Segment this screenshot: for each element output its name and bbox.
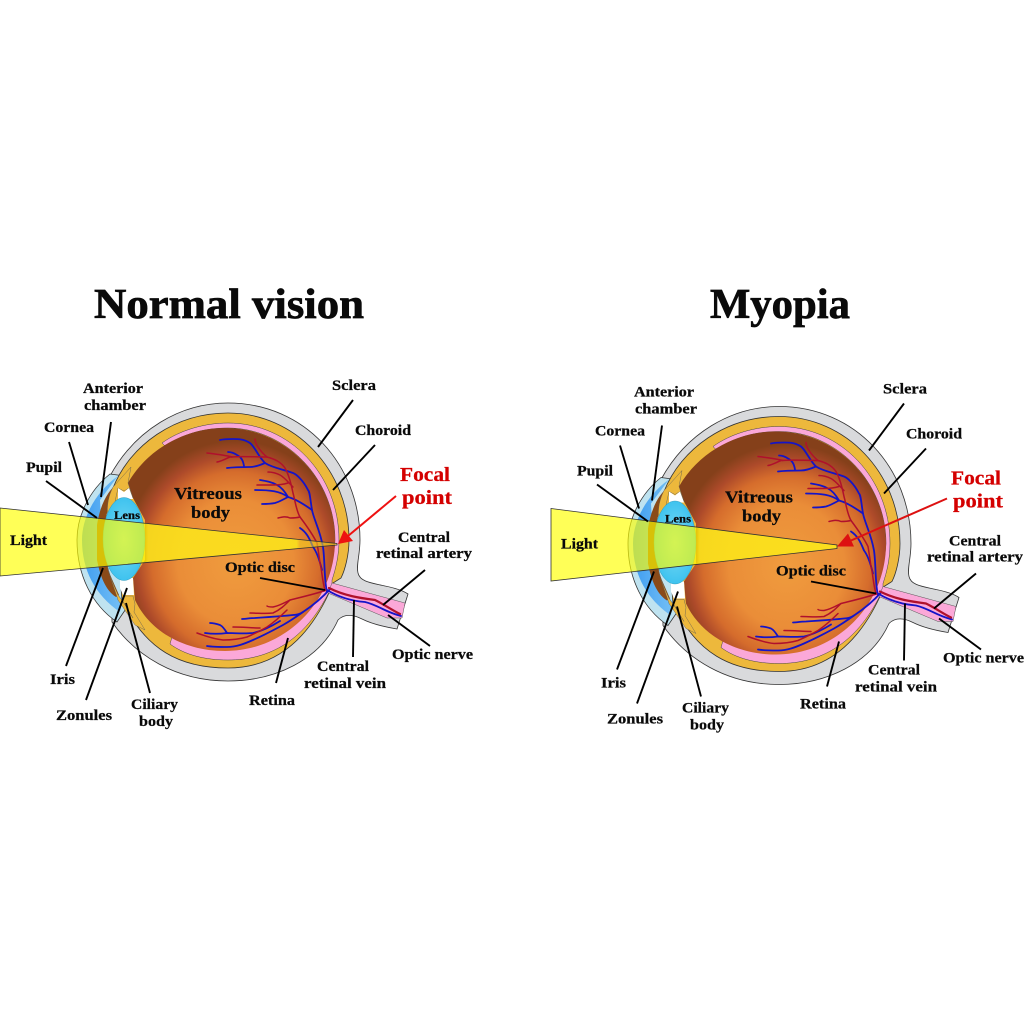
eye: retina	[713, 426, 890, 664]
eye: vitreous body	[128, 428, 335, 651]
label: Cornea: Cornea	[595, 424, 646, 440]
label: Anterior chamber: chamber	[635, 402, 697, 418]
eye: sclera and optic nerve sheath	[110, 403, 408, 681]
label: Vitreous body: body	[742, 506, 782, 526]
eye: lens	[103, 498, 145, 580]
label: Zonules: Zonules	[56, 708, 112, 724]
label: Pupil: Pupil	[577, 464, 613, 480]
eye: choroid	[113, 413, 349, 668]
eye: zonules upper	[118, 488, 133, 499]
label: Iris	[50, 568, 103, 688]
eye: zonules lower	[671, 582, 685, 598]
label: Central retinal artery: Central	[398, 530, 450, 546]
label: Optic disc	[225, 560, 325, 590]
vessels: upper retinal veins	[771, 442, 878, 596]
eye: sclera and optic nerve sheath	[661, 406, 959, 684]
label: Pupil	[577, 464, 648, 522]
label: Vitreous body	[174, 484, 242, 522]
eye: cornea	[628, 478, 683, 626]
label: Zonules	[56, 588, 127, 724]
label: Iris: Iris	[601, 676, 626, 692]
label: Vitreous body: Vitreous	[174, 484, 242, 503]
callout: Focal point	[837, 468, 1003, 546]
callout: Focal point: point	[402, 487, 452, 509]
label: Sclera: Sclera	[883, 382, 928, 398]
label: Ciliary body	[677, 606, 730, 734]
label: Ciliary body: body	[139, 714, 174, 730]
label: Central retinal vein	[855, 604, 938, 696]
eye: ciliary body lower	[659, 572, 696, 634]
label: Pupil: Pupil	[26, 460, 62, 476]
callout: Focal point: Focal	[400, 464, 450, 486]
callout: Focal point	[338, 464, 452, 544]
eye: ciliary body upper	[658, 470, 684, 522]
vessels: lower retinal veins	[205, 589, 330, 647]
vessels: lower retinal arteries	[197, 590, 327, 640]
label: Sclera: Sclera	[332, 378, 377, 394]
label: Pupil	[26, 460, 97, 518]
label: Zonules	[607, 592, 678, 728]
label: Sclera	[869, 382, 928, 450]
vessels: optic nerve bundle	[327, 588, 401, 616]
label: Cornea: Cornea	[44, 420, 95, 436]
eye: ciliary body lower	[108, 568, 145, 630]
vessels: upper retinal veins	[220, 439, 327, 592]
eye: vitreous body	[679, 432, 886, 654]
label: Optic nerve	[939, 618, 1024, 666]
eye: retina	[162, 423, 339, 660]
eye: anterior chamber	[633, 480, 673, 616]
eye: zonules upper	[669, 492, 684, 502]
label: Anterior chamber: Anterior	[83, 381, 143, 397]
label: Anterior chamber	[634, 384, 697, 500]
label: Optic disc: Optic disc	[225, 560, 295, 576]
callout: Focal point: Focal	[951, 468, 1001, 490]
label: Central retinal artery: Central	[949, 534, 1001, 550]
label: Zonules: Zonules	[607, 712, 663, 728]
label: Optic disc: Optic disc	[776, 564, 846, 580]
label: Anterior chamber: chamber	[84, 398, 146, 414]
label: Central retinal vein: retinal vein	[304, 676, 387, 692]
label: Vitreous body: body	[191, 503, 231, 522]
label: Choroid: Choroid	[355, 423, 412, 439]
label: Ciliary body: body	[690, 718, 725, 734]
panel: myopia eye diagram	[551, 382, 1024, 734]
eye: zonules lower	[120, 578, 134, 595]
label: Vitreous body	[725, 488, 793, 526]
label: Central retinal vein: Central	[868, 662, 920, 678]
label: Optic nerve: Optic nerve	[943, 650, 1024, 666]
label: Light: Light	[561, 536, 598, 552]
label: Vitreous body: Vitreous	[725, 488, 793, 506]
label: Central retinal vein	[304, 600, 387, 692]
eye: iris	[97, 483, 119, 597]
callout: Focal point: point	[953, 490, 1003, 512]
eye: optic nerve core	[328, 583, 405, 618]
vessels: lower retinal arteries	[748, 594, 878, 644]
label: Retina	[800, 642, 847, 712]
label: Central retinal artery: retinal artery	[376, 546, 473, 562]
light beam	[551, 508, 837, 581]
label: Lens: Lens	[665, 514, 692, 526]
vessels: upper retinal arteries	[758, 442, 876, 594]
label: Ciliary body: Ciliary	[131, 697, 179, 713]
panel: normal vision eye diagram	[0, 378, 473, 730]
label: Optic nerve	[388, 615, 473, 663]
label: Central retinal artery	[376, 530, 473, 605]
label: Ciliary body: Ciliary	[682, 700, 730, 716]
label: Anterior chamber: Anterior	[634, 384, 694, 400]
label: Choroid	[884, 426, 963, 494]
label: Choroid: Choroid	[906, 426, 963, 442]
eye: choroid	[664, 416, 900, 672]
title: Myopia: Myopia	[710, 282, 850, 328]
eye: ciliary body upper	[107, 467, 133, 518]
label: Retina: Retina	[800, 696, 847, 712]
label: Retina	[249, 638, 296, 709]
eye: lens	[654, 501, 696, 584]
eye: anterior chamber	[82, 476, 122, 612]
vessels: upper retinal arteries	[207, 439, 325, 590]
label: Retina: Retina	[249, 693, 296, 709]
vessels: lower retinal veins	[756, 592, 881, 650]
label: Lens: Lens	[114, 510, 141, 522]
label: Central retinal artery: retinal artery	[927, 550, 1024, 566]
label: Choroid	[333, 423, 412, 490]
eye: cornea	[77, 474, 132, 622]
label: Central retinal vein: retinal vein	[855, 680, 938, 696]
label: Ciliary body	[126, 603, 179, 730]
label: Anterior chamber	[83, 381, 146, 497]
label: Central retinal artery	[927, 534, 1024, 608]
eye: optic nerve core	[879, 586, 956, 622]
vessels: optic nerve bundle	[878, 592, 952, 620]
label: Central retinal vein: Central	[317, 659, 369, 675]
label: Sclera	[318, 378, 377, 447]
label: Light: Light	[10, 533, 47, 549]
title: Normal vision: Normal vision	[94, 282, 364, 328]
label: Iris: Iris	[50, 672, 75, 688]
label: Cornea	[595, 424, 646, 508]
label: Optic nerve: Optic nerve	[392, 647, 473, 663]
light beam	[0, 508, 337, 576]
eye: iris	[648, 486, 670, 600]
label: Optic disc	[776, 564, 876, 594]
label: Iris	[601, 572, 654, 692]
label: Cornea	[44, 420, 95, 505]
